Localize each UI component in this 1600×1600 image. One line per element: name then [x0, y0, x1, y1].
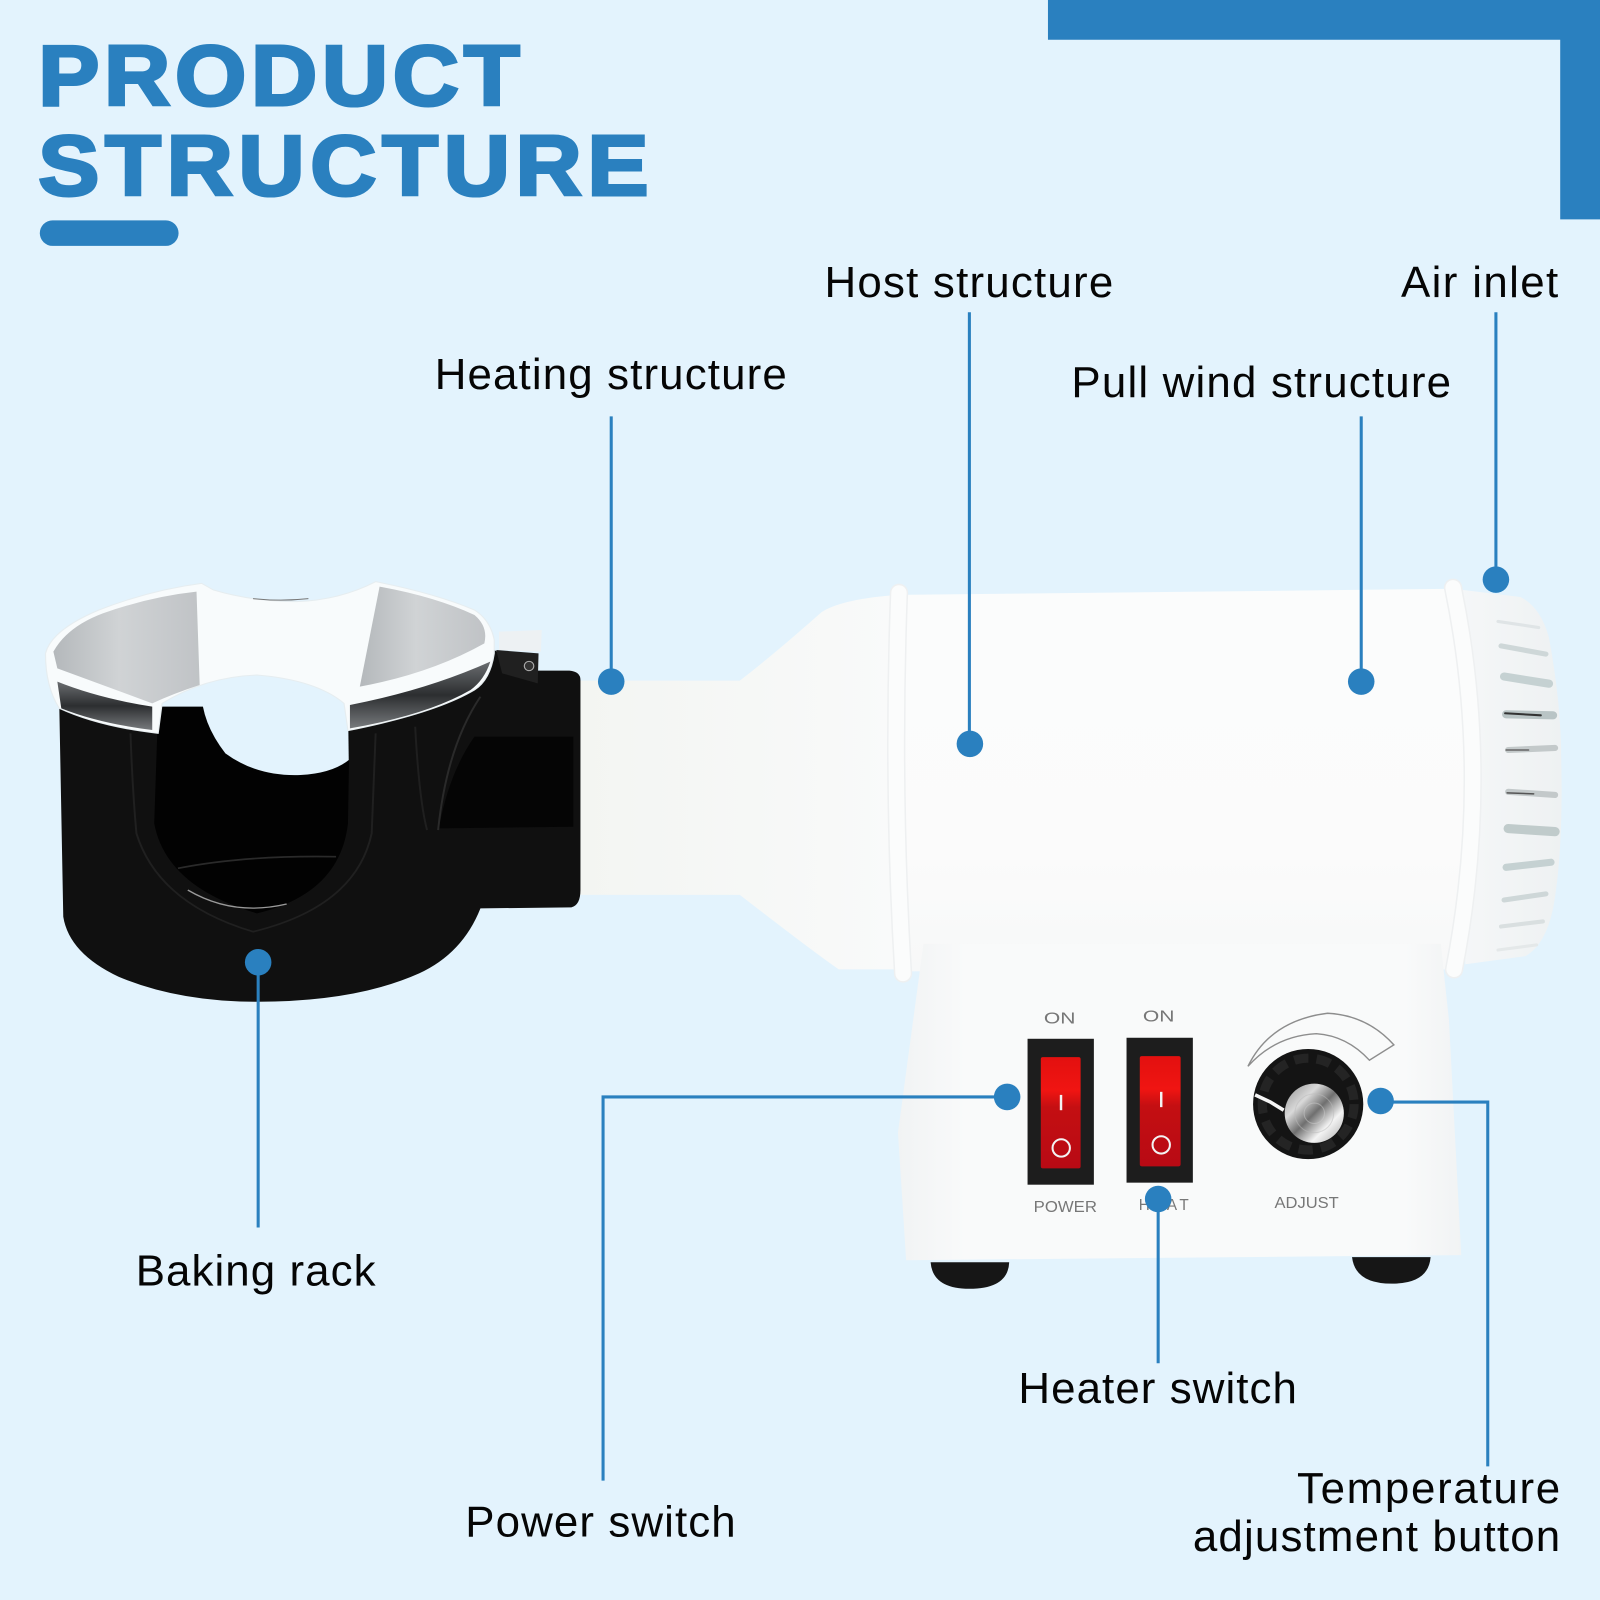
connector shading: [439, 737, 573, 828]
panel print: ADJUST: [1274, 1195, 1339, 1212]
clear lid: [45, 582, 494, 733]
panel print: ON: [1044, 1010, 1076, 1027]
body seam: [892, 653, 895, 918]
callout: air inlet: [1401, 258, 1558, 593]
callout: host structure: Host structure: [824, 258, 1113, 307]
rack body and connector: [59, 650, 580, 1002]
hinge screw: [524, 661, 534, 671]
title underline: [40, 220, 179, 246]
callout: pull wind structure: [1071, 358, 1451, 695]
panel print: POWER: [1034, 1199, 1097, 1216]
inner base highlights: [178, 857, 336, 868]
baking rack: [45, 582, 580, 1002]
callout: heater switch: Heater switch: [1018, 1364, 1297, 1413]
callout: baking rack: [136, 949, 376, 1296]
neck: [580, 595, 898, 969]
power switch: [1028, 1039, 1094, 1185]
panel print: HEAT: [1139, 1197, 1189, 1214]
foot right: [1352, 1257, 1431, 1284]
product: roaster: [45, 582, 1562, 1289]
callout: air inlet: Air inlet: [1401, 258, 1558, 307]
callout: power switch: [465, 1084, 1020, 1547]
window through rack: [202, 687, 349, 775]
panel print: [1034, 1008, 1339, 1216]
title: [38, 28, 649, 213]
right ring: [1453, 588, 1473, 969]
air inlet grille: [1461, 590, 1562, 964]
temperature scale arc: [1248, 1013, 1394, 1066]
lid hinge: [496, 630, 542, 683]
temperature knob: [1253, 1049, 1363, 1159]
left ring: [896, 593, 903, 973]
callout: heater switch: [1018, 1186, 1297, 1413]
callout: host structure: [824, 258, 1113, 757]
heater switch: [1127, 1038, 1193, 1183]
panel print: ON: [1143, 1008, 1174, 1025]
callout: temperature adjustment button: Temperature: [1297, 1464, 1560, 1513]
corner frame: [1048, 0, 1600, 219]
callout: baking rack: Baking rack: [136, 1247, 376, 1296]
title: STRUCTURE: [38, 118, 649, 213]
title: PRODUCT: [38, 28, 520, 123]
callout: heating structure: [435, 350, 787, 695]
callout: power switch: Power switch: [465, 1498, 736, 1547]
callout: pull wind structure: Pull wind structure: [1071, 358, 1451, 407]
front opening outline: [130, 733, 376, 932]
main cylinder: [898, 589, 1474, 971]
callout: temperature adjustment button: adjustment button: [1193, 1512, 1560, 1561]
front opening: [154, 707, 350, 913]
callout: temperature adjustment button: [1193, 1088, 1560, 1561]
callout: heating structure: Heating structure: [435, 350, 787, 399]
base: [898, 944, 1461, 1260]
foot left: [931, 1262, 1009, 1289]
